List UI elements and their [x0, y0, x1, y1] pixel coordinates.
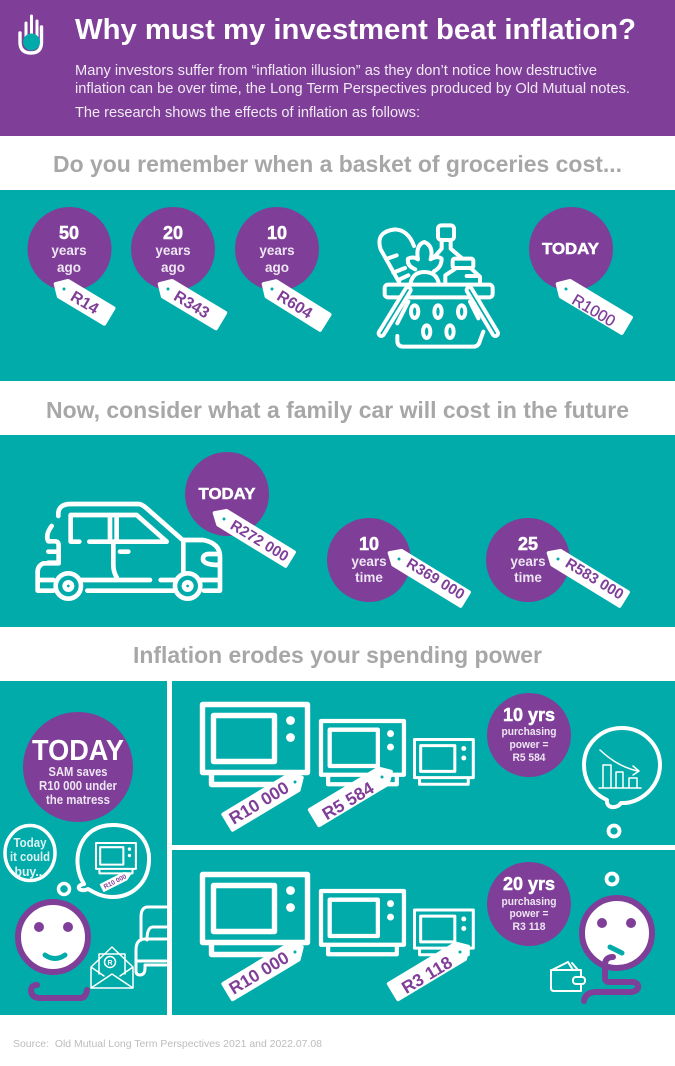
25 years time badge: 25 — [518, 534, 538, 554]
today badge: TODAY — [542, 241, 599, 258]
20 years ago badge: years — [155, 243, 191, 258]
50 years ago badge: R14 — [67, 288, 101, 318]
speech bubble: today it could buy: Today — [14, 836, 47, 850]
intro text — [75, 63, 630, 121]
icon: grocery basket — [379, 225, 495, 347]
20 years ago badge — [131, 207, 225, 328]
20 yrs purchasing power badge — [487, 862, 571, 946]
price tag R10 000: R10 000 — [225, 777, 293, 828]
panel: car — [0, 435, 675, 627]
price tag R3 118: R3 118 — [398, 952, 456, 998]
panel: 10 years — [172, 681, 675, 845]
10 years time badge: years — [351, 554, 387, 569]
price tag R10 000 — [223, 770, 306, 830]
header panel — [0, 0, 675, 136]
price tag R3 118 — [389, 939, 473, 999]
price tag R10 000: R10 000 — [225, 947, 293, 998]
50 years ago badge: ago — [57, 260, 81, 275]
10 yrs purchasing power badge: purchasing — [502, 726, 556, 738]
thought bubble: falling chart — [584, 728, 660, 836]
20 yrs purchasing power badge: 20 yrs — [503, 873, 555, 894]
intro text: The research shows the effects of inflation as follows: — [75, 105, 420, 121]
today circle: SAM saves — [48, 765, 108, 779]
20 years ago badge: R343 — [171, 288, 212, 322]
10 years time badge: time — [355, 570, 383, 585]
speech bubble: today it could buy — [5, 826, 55, 880]
speech bubble: today it could buy: it could — [10, 850, 50, 864]
50 years ago badge — [28, 207, 113, 324]
20 yrs purchasing power badge: power = — [510, 908, 548, 920]
10 years ago badge: years — [259, 243, 295, 258]
10 years ago badge: ago — [265, 260, 289, 275]
today circle — [23, 712, 133, 822]
25 years time badge: years — [510, 554, 546, 569]
10 years time badge: R369 000 — [403, 555, 468, 603]
heading: car: Now, consider what a family car will cost in the future — [46, 397, 629, 423]
icon: wallet — [551, 962, 585, 991]
microwaves shrinking — [202, 704, 473, 784]
icon: envelope — [91, 947, 133, 988]
thought bubble: microwave: R10 000 — [103, 873, 128, 891]
price tag R10 000 — [223, 939, 306, 999]
20 yrs purchasing power badge: purchasing — [502, 896, 556, 908]
thought bubble: microwave — [58, 825, 149, 897]
today badge: R1000 — [569, 292, 618, 331]
25 years time badge — [486, 518, 628, 606]
speech bubble: today it could buy: buy... — [14, 865, 46, 879]
today circle: R10 000 under — [39, 779, 117, 793]
intro text: inflation can be over time, the Long Term Perspectives produced by Old Mutual notes. — [75, 81, 630, 97]
10 years time badge: 10 — [359, 534, 379, 554]
panel: 20 years — [172, 850, 675, 1015]
50 years ago badge: 50 — [59, 223, 79, 243]
10 years time badge — [327, 518, 469, 606]
10 yrs purchasing power badge: power = — [510, 739, 548, 751]
10 years ago badge — [235, 207, 330, 330]
icon: sofa bed — [136, 907, 166, 975]
source note: Source: Old Mutual Long Term Perspectives 2021 and 2022.07.08 — [13, 1038, 322, 1050]
thinking Sam — [582, 874, 652, 1001]
microwaves shrinking — [202, 874, 473, 955]
10 years ago badge: R604 — [274, 288, 315, 323]
smiling Sam — [18, 902, 88, 998]
icon: hand logo — [20, 16, 42, 53]
heading: groceries: Do you remember when a basket of groceries cost... — [53, 151, 622, 177]
intro text: Many investors suffer from “inflation illusion” as they don’t notice how destructive — [75, 63, 597, 79]
heading: spending power: Inflation erodes your spending power — [133, 642, 542, 668]
icon: car — [38, 504, 220, 599]
price tag R5 584: R5 584 — [319, 778, 377, 824]
20 yrs purchasing power badge: R3 118 — [512, 921, 546, 933]
panel: Sam today — [0, 681, 167, 1015]
10 yrs purchasing power badge — [487, 693, 571, 777]
20 years ago badge: 20 — [163, 223, 183, 243]
panel: groceries — [0, 190, 675, 381]
25 years time badge: R583 000 — [562, 555, 627, 603]
icon: envelope: R — [107, 960, 113, 967]
10 yrs purchasing power badge: 10 yrs — [503, 704, 555, 725]
today circle: TODAY — [32, 735, 124, 767]
50 years ago badge: years — [51, 243, 87, 258]
10 yrs purchasing power badge: R5 584 — [512, 752, 546, 764]
today badge — [185, 452, 294, 566]
today circle: the matress — [46, 793, 110, 807]
price tag R5 584 — [310, 764, 395, 825]
today badge — [529, 207, 631, 333]
title: Why must my investment beat inflation? — [75, 14, 636, 46]
10 years ago badge: 10 — [267, 223, 287, 243]
today badge: R272 000 — [227, 517, 292, 565]
25 years time badge: time — [514, 570, 542, 585]
today badge: TODAY — [198, 486, 256, 503]
20 years ago badge: ago — [161, 260, 185, 275]
